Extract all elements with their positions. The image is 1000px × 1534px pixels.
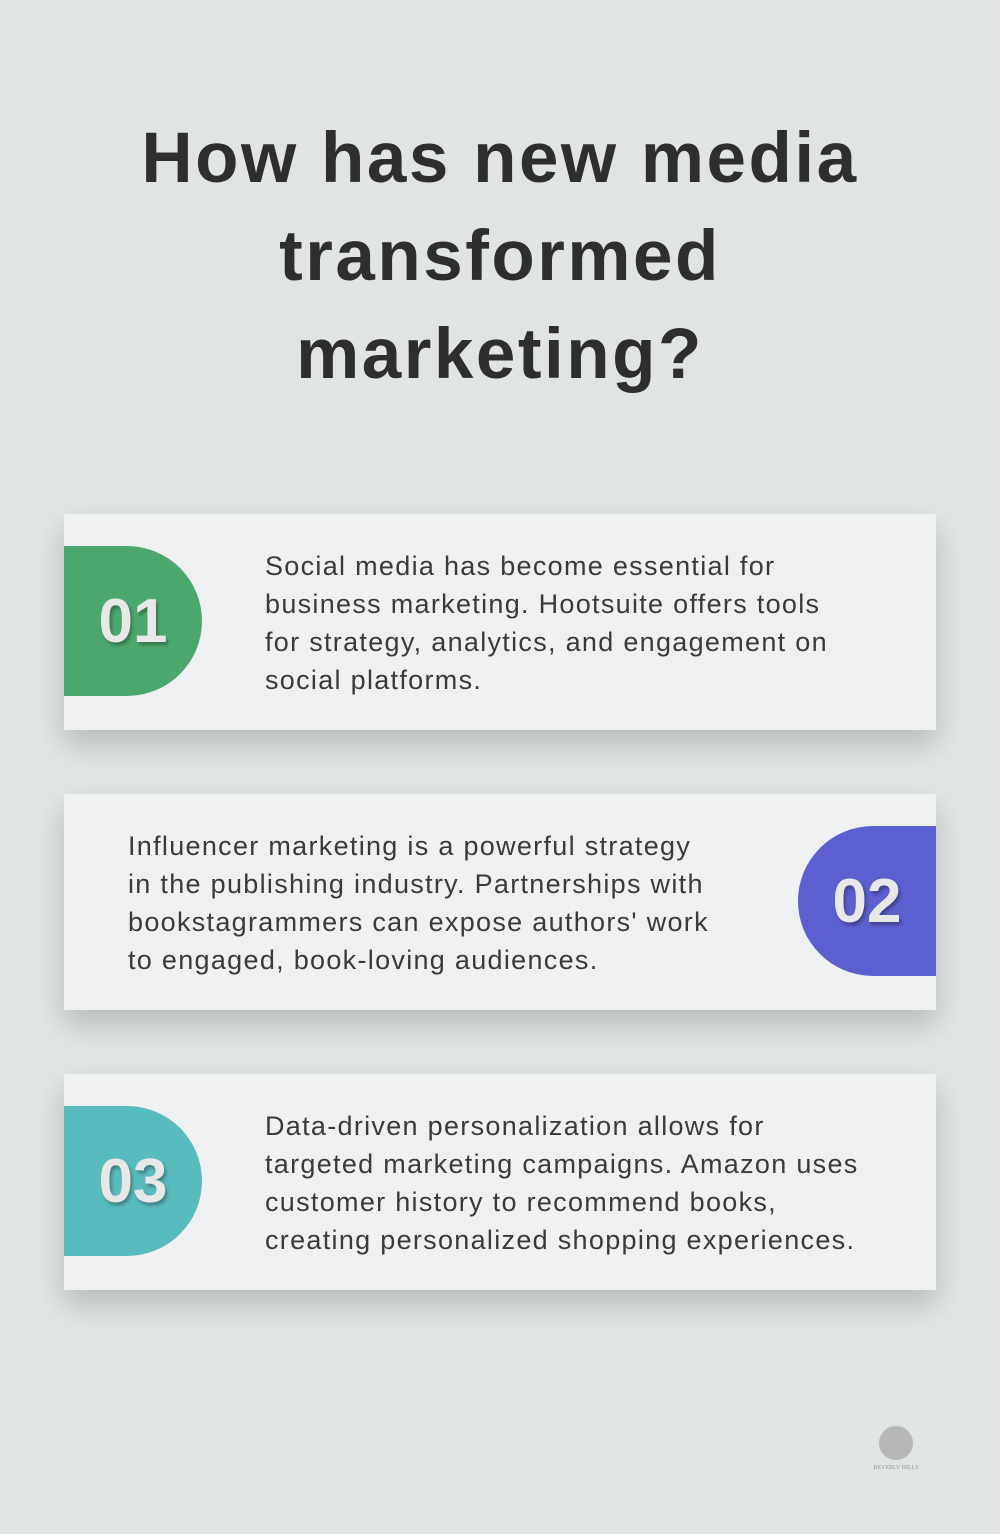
logo (873, 1426, 919, 1471)
text 2: to engaged, book-loving audiences. (128, 945, 599, 975)
logo: BEVERLY HILLS (873, 1465, 919, 1471)
badge 02: 02 (833, 866, 901, 936)
text 3: creating personalized shopping experiences. (265, 1225, 855, 1255)
text 1: business marketing. Hootsuite offers tools (265, 589, 820, 619)
text 2 (128, 831, 709, 975)
badge 01 (64, 546, 202, 696)
text 1: Social media has become essential for (265, 551, 775, 581)
text 2: Influencer marketing is a powerful strategy (128, 831, 691, 861)
text 1: social platforms. (265, 665, 482, 695)
title: marketing? (296, 315, 704, 394)
card 1 (64, 514, 936, 730)
title: How has new media (141, 119, 859, 198)
card 3 (64, 1074, 936, 1290)
text 2: in the publishing industry. Partnerships with (128, 869, 704, 899)
badge 02 (798, 826, 936, 976)
badge 03: 03 (99, 1146, 167, 1216)
text 1: for strategy, analytics, and engagement on (265, 627, 828, 657)
text 2: bookstagrammers can expose authors' work (128, 907, 709, 937)
title: transformed (279, 217, 721, 296)
badge 01: 01 (99, 586, 167, 656)
text 1 (265, 551, 828, 695)
text 3 (265, 1111, 859, 1255)
card 2 (64, 794, 936, 1010)
text 3: targeted marketing campaigns. Amazon uses (265, 1149, 859, 1179)
text 3: customer history to recommend books, (265, 1187, 777, 1217)
badge 03 (64, 1106, 202, 1256)
text 3: Data-driven personalization allows for (265, 1111, 765, 1141)
title (141, 119, 859, 394)
